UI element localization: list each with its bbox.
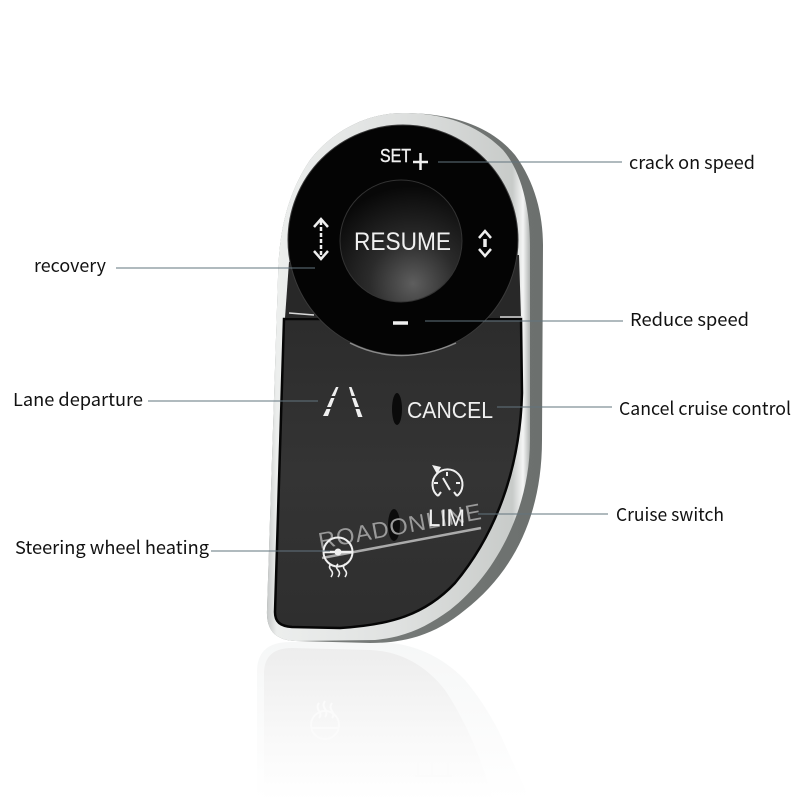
indicator slot lower xyxy=(388,509,400,541)
callout: recovery: recovery xyxy=(34,252,107,278)
icon: left dashed arrows xyxy=(314,219,328,259)
icon: right arrows xyxy=(479,231,491,256)
LIM button text: LIM xyxy=(428,505,465,532)
callout: crack on speed: crack on speed xyxy=(629,149,755,175)
icon: speedometer limiter xyxy=(432,465,463,496)
seam highlights xyxy=(289,313,522,317)
icon: steering wheel heating xyxy=(324,538,353,577)
minus button xyxy=(393,321,408,325)
main black dial xyxy=(288,125,518,355)
callout: Steering wheel heating: Steering wheel heating xyxy=(15,534,209,560)
CANCEL button text: CANCEL xyxy=(407,397,493,423)
SET plus button: SET xyxy=(380,146,411,166)
device body side xyxy=(267,113,543,643)
reflection of device xyxy=(257,642,530,800)
SET plus button xyxy=(380,146,428,170)
center dome RESUME button xyxy=(340,180,462,302)
callout: Cancel cruise control: Cancel cruise control xyxy=(619,395,791,421)
silver rim xyxy=(267,113,530,641)
callout: Reduce speed: Reduce speed xyxy=(630,306,749,332)
lower button panel xyxy=(275,319,522,628)
callout: Cruise switch: Cruise switch xyxy=(616,501,724,527)
callout: Lane departure: Lane departure xyxy=(13,386,143,412)
device: steering control panel xyxy=(267,113,543,643)
indicator slot upper xyxy=(392,393,402,425)
upper panel shoulder xyxy=(285,255,521,318)
center dome RESUME button: RESUME xyxy=(354,228,451,256)
watermark: ROADONLINE xyxy=(316,498,484,554)
icon: lane departure xyxy=(323,387,362,417)
